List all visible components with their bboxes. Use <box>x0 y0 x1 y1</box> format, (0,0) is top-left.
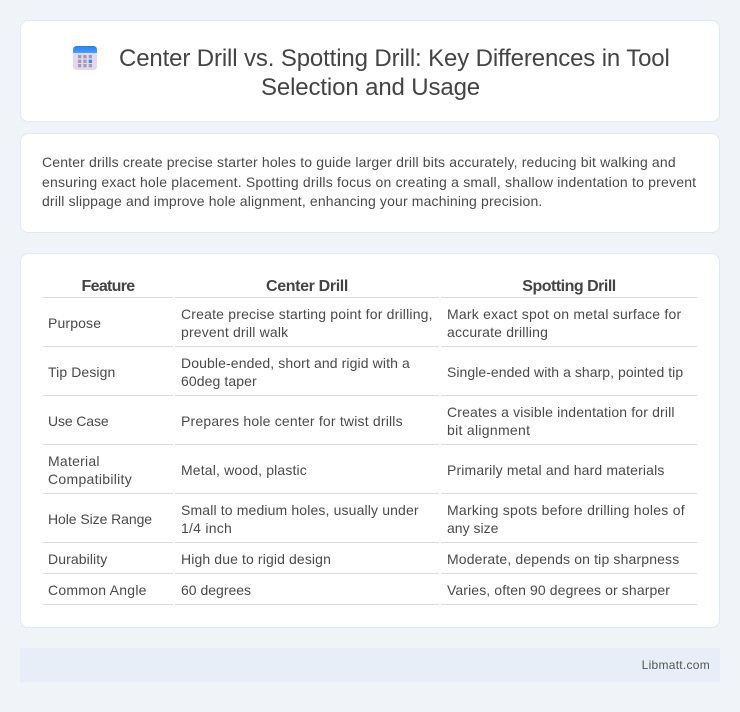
comparison table: Prepares hole center for twist drills <box>181 413 403 429</box>
comparison table: Double-ended, short and rigid with a <box>181 355 410 371</box>
table header row <box>43 278 697 298</box>
header panel <box>20 20 720 122</box>
title: Selection and Usage <box>261 74 480 101</box>
comparison table: Hole Size Range <box>48 511 152 527</box>
comparison table panel <box>20 253 720 628</box>
intro text: drill slippage and improve hole alignment, enhancing your machining precision. <box>42 193 542 209</box>
comparison table: Center Drill <box>266 278 348 295</box>
comparison table: Tip Design <box>48 364 115 380</box>
row: tip design <box>43 355 697 396</box>
comparison table: Use Case <box>48 413 109 429</box>
comparison table: Create precise starting point for drilling, <box>181 306 433 322</box>
comparison table: Durability <box>48 551 107 567</box>
comparison table: Compatibility <box>48 471 132 487</box>
comparison table: Spotting Drill <box>522 278 616 295</box>
comparison table: Feature <box>82 278 134 295</box>
comparison table: 60 degrees <box>181 582 251 598</box>
footer bar <box>20 648 720 682</box>
comparison table: 60deg taper <box>181 373 257 389</box>
row: use case <box>43 404 697 445</box>
icon: calendar <box>73 46 97 70</box>
intro text <box>42 154 696 209</box>
intro text: ensuring exact hole placement. Spotting drills focus on creating a small, shallow indentation to prevent <box>42 174 696 190</box>
comparison table: bit alignment <box>447 422 530 438</box>
row: durability <box>43 551 697 574</box>
footer source text: Libmatt.com <box>642 658 710 672</box>
row: hole size range <box>43 502 697 543</box>
intro text: Center drills create precise starter holes to guide larger drill bits accurately, reducing bit walking and <box>42 154 676 170</box>
comparison table: 1/4 inch <box>181 520 232 536</box>
comparison table: any size <box>447 520 498 536</box>
comparison table: Marking spots before drilling holes of <box>447 502 685 518</box>
comparison table: Varies, often 90 degrees or sharper <box>447 582 670 598</box>
comparison table: accurate drilling <box>447 324 548 340</box>
row: purpose <box>43 306 697 347</box>
comparison table: Moderate, depends on tip sharpness <box>447 551 679 567</box>
comparison table: prevent drill walk <box>181 324 288 340</box>
comparison table: Primarily metal and hard materials <box>447 462 665 478</box>
comparison table: Metal, wood, plastic <box>181 462 307 478</box>
comparison table: Mark exact spot on metal surface for <box>447 306 681 322</box>
intro panel <box>20 133 720 233</box>
comparison table: Single-ended with a sharp, pointed tip <box>447 364 683 380</box>
comparison table: Purpose <box>48 315 101 331</box>
comparison table: High due to rigid design <box>181 551 331 567</box>
comparison table: Small to medium holes, usually under <box>181 502 419 518</box>
title: Center Drill vs. Spotting Drill: Key Differences in Tool <box>119 45 670 72</box>
comparison table: Common Angle <box>48 582 147 598</box>
comparison table: Material <box>48 453 100 469</box>
row: common angle <box>43 582 697 605</box>
comparison table: Creates a visible indentation for drill <box>447 404 675 420</box>
row: material compatibility <box>43 453 697 494</box>
title <box>119 45 670 101</box>
